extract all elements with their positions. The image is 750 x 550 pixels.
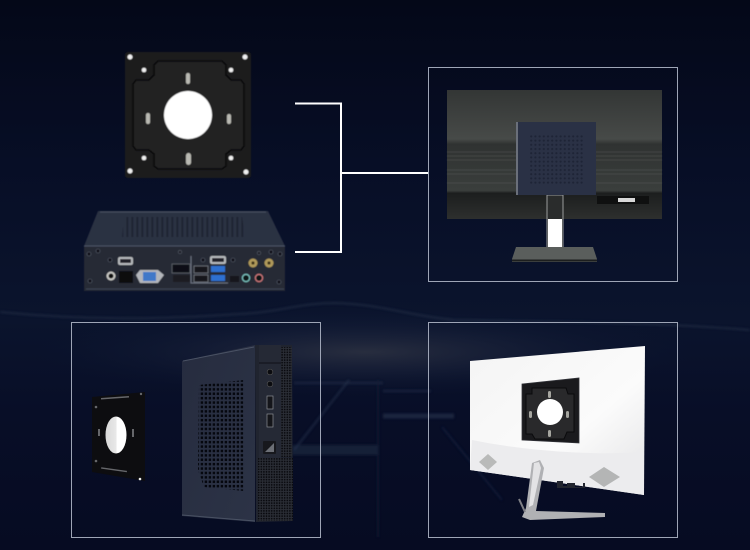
panel: mini PC rear view xyxy=(84,211,285,291)
monitor label xyxy=(597,196,649,204)
panel frame xyxy=(428,322,678,538)
monitor stand xyxy=(547,195,563,250)
PC vents xyxy=(122,217,245,237)
panel: rear of monitor with PC mounted xyxy=(428,68,678,282)
panel: white monitor with plate xyxy=(428,322,678,538)
tower power button xyxy=(263,441,276,454)
tower ports panel xyxy=(259,345,281,458)
tower front mesh xyxy=(281,347,292,457)
PC screws xyxy=(87,249,282,284)
monitor ports xyxy=(557,481,585,488)
monitor diamonds xyxy=(479,454,497,470)
PC top face xyxy=(84,211,285,246)
panel frame xyxy=(72,322,320,538)
PC ports xyxy=(106,256,274,283)
monitor back xyxy=(447,90,662,219)
plate on monitor xyxy=(522,378,579,443)
monitor lower shell xyxy=(470,440,644,495)
tilted plate details xyxy=(95,393,142,480)
monitor base xyxy=(512,247,597,262)
plate raised cross outline xyxy=(133,61,244,169)
monitor vent lines xyxy=(447,152,662,183)
tilted plate xyxy=(92,392,145,481)
plate hole xyxy=(537,399,563,425)
plate keyholes xyxy=(146,73,231,165)
tower front xyxy=(255,345,293,522)
white monitor back xyxy=(470,346,645,495)
tower perforation xyxy=(198,380,244,491)
panel: VESA plate xyxy=(125,52,251,178)
mounted PC xyxy=(517,122,596,195)
plate centre hole xyxy=(164,91,212,139)
tower PC side xyxy=(182,345,255,522)
panel: PC and plate xyxy=(72,322,320,538)
panel frame xyxy=(428,68,678,282)
PC rear face xyxy=(84,246,285,291)
monitor stand xyxy=(522,460,605,520)
plate slots xyxy=(529,391,569,437)
connector lines xyxy=(295,104,428,252)
plate screw holes xyxy=(128,54,248,174)
tilted plate hole xyxy=(106,416,126,454)
